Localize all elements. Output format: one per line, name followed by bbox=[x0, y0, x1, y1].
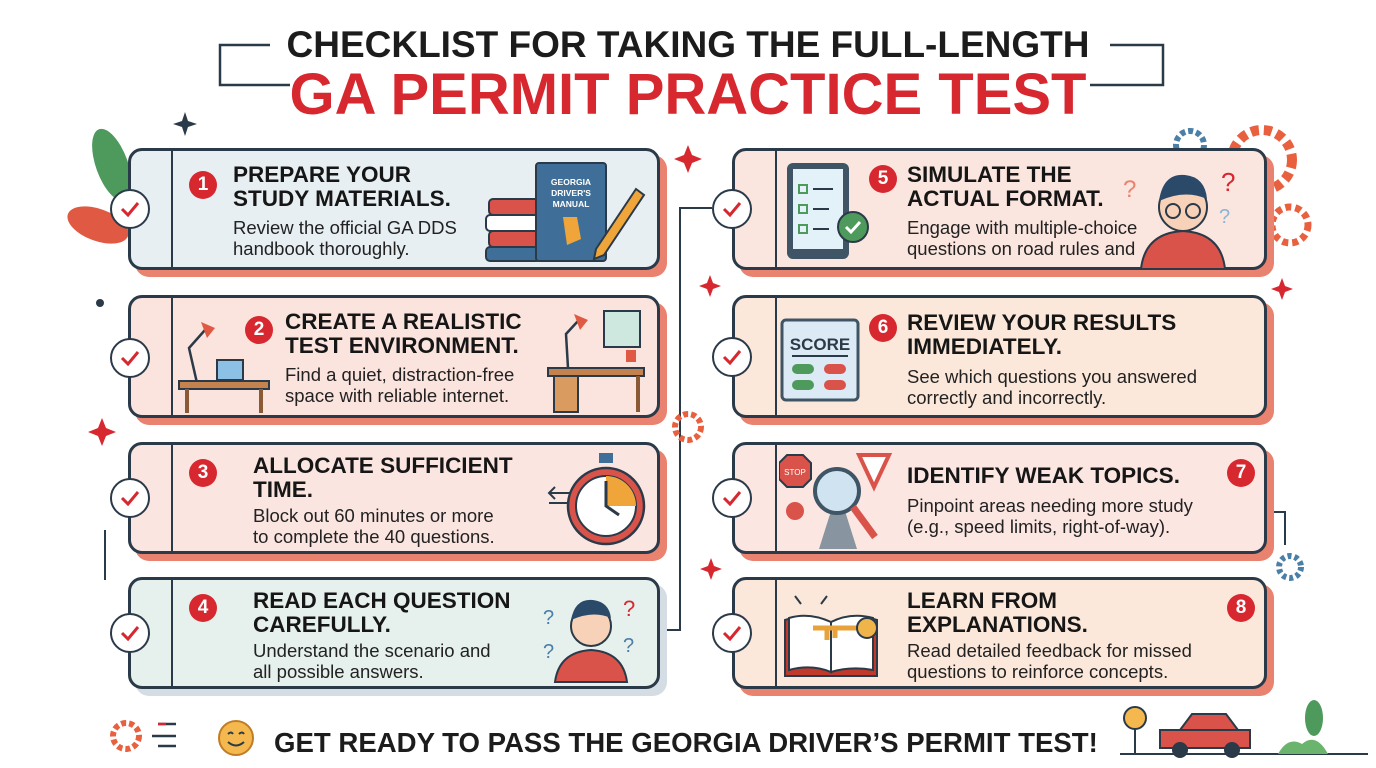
icon: thinking person: ? bbox=[1221, 167, 1235, 197]
icon: books and manual: DRIVER'S bbox=[551, 188, 591, 198]
number 2 bbox=[245, 316, 273, 344]
icon: book with key bbox=[784, 595, 878, 677]
icon: confused person: ? bbox=[623, 596, 635, 621]
number 4 bbox=[189, 594, 217, 622]
icon: score screen bbox=[780, 318, 860, 402]
body 7: Pinpoint areas needing more study bbox=[907, 495, 1193, 516]
body 4 bbox=[253, 640, 491, 682]
icon: desk with laptop bbox=[178, 322, 270, 413]
icon: thinking person: ? bbox=[1219, 206, 1230, 228]
body 1 bbox=[233, 217, 457, 259]
icon: books and manual: GEORGIA bbox=[551, 177, 591, 187]
icon: confused person: ? bbox=[543, 641, 554, 663]
icon: thinking person bbox=[1123, 167, 1235, 268]
title: CHECKLIST FOR TAKING THE FULL-LENGTH bbox=[287, 24, 1089, 65]
heading 3 bbox=[253, 453, 513, 502]
heading 8: EXPLANATIONS. bbox=[907, 612, 1088, 637]
heading 6: REVIEW YOUR RESULTS bbox=[907, 310, 1176, 335]
body 1: handbook thoroughly. bbox=[233, 238, 410, 259]
number 8 bbox=[1227, 594, 1255, 622]
card 5 bbox=[732, 148, 1267, 270]
heading 4: READ EACH QUESTION bbox=[253, 588, 511, 613]
footer icons left bbox=[110, 720, 254, 756]
heading 3: ALLOCATE SUFFICIENT bbox=[253, 453, 513, 478]
check 3 bbox=[110, 478, 150, 518]
number 8: 8 bbox=[1236, 597, 1246, 618]
icon: signs and magnifier: STOP bbox=[784, 468, 806, 477]
number 3: 3 bbox=[198, 462, 208, 483]
number 2: 2 bbox=[254, 319, 264, 340]
number 6: 6 bbox=[878, 317, 888, 338]
number 7: 7 bbox=[1236, 462, 1246, 483]
icon: car and tree bbox=[1120, 700, 1368, 758]
icon: signs and magnifier bbox=[779, 453, 892, 549]
heading 2 bbox=[285, 309, 522, 358]
body 6 bbox=[907, 366, 1197, 408]
check 6 bbox=[712, 337, 752, 377]
icon: tablet checklist bbox=[787, 163, 869, 259]
footer text: GET READY TO PASS THE GEORGIA DRIVER’S PERMIT TEST! bbox=[274, 727, 1098, 758]
card 2 bbox=[128, 295, 660, 418]
number 1: 1 bbox=[198, 174, 208, 195]
number 4: 4 bbox=[198, 597, 208, 618]
check 4 bbox=[110, 613, 150, 653]
body 6: correctly and incorrectly. bbox=[907, 387, 1106, 408]
card 3 bbox=[128, 442, 660, 554]
card 4 bbox=[128, 577, 660, 689]
card 1 bbox=[128, 148, 660, 270]
check 1 bbox=[110, 189, 150, 229]
icon: confused person: ? bbox=[543, 607, 554, 629]
icon: stopwatch bbox=[548, 453, 646, 546]
body 8 bbox=[907, 640, 1192, 682]
number 3 bbox=[189, 459, 217, 487]
heading 7: IDENTIFY WEAK TOPICS. bbox=[907, 463, 1180, 488]
icon: confused person bbox=[543, 596, 635, 683]
heading 1 bbox=[233, 162, 451, 211]
body 3: to complete the 40 questions. bbox=[253, 526, 495, 547]
check 8 bbox=[712, 613, 752, 653]
body 3 bbox=[253, 505, 495, 547]
check 2 bbox=[110, 338, 150, 378]
number 7 bbox=[1227, 459, 1255, 487]
check 7 bbox=[712, 478, 752, 518]
title bbox=[287, 24, 1089, 127]
body 2 bbox=[285, 364, 514, 406]
heading 5: SIMULATE THE bbox=[907, 162, 1072, 187]
heading 6: IMMEDIATELY. bbox=[907, 334, 1062, 359]
heading 6 bbox=[907, 310, 1176, 359]
body 2: space with reliable internet. bbox=[285, 385, 509, 406]
title frame bbox=[218, 44, 1164, 86]
check 5 bbox=[712, 189, 752, 229]
heading 8 bbox=[907, 588, 1088, 637]
heading 3: TIME. bbox=[253, 477, 313, 502]
title: GA PERMIT PRACTICE TEST bbox=[290, 62, 1086, 127]
number 6 bbox=[869, 314, 897, 342]
heading 8: LEARN FROM bbox=[907, 588, 1057, 613]
number 5 bbox=[869, 165, 897, 193]
icon: confused person: ? bbox=[623, 635, 634, 657]
icon: score screen: SCORE bbox=[790, 335, 850, 354]
heading 1: PREPARE YOUR bbox=[233, 162, 411, 187]
icon: books and manual bbox=[485, 162, 646, 262]
body 2: Find a quiet, distraction-free bbox=[285, 364, 514, 385]
body 5: Engage with multiple-choice bbox=[907, 217, 1137, 238]
body 4: all possible answers. bbox=[253, 661, 424, 682]
body 8: questions to reinforce concepts. bbox=[907, 661, 1168, 682]
heading 5 bbox=[907, 162, 1104, 211]
body 7 bbox=[907, 495, 1193, 537]
icon: books and manual: MANUAL bbox=[553, 199, 589, 209]
card 7 bbox=[732, 442, 1267, 554]
body 3: Block out 60 minutes or more bbox=[253, 505, 494, 526]
body 1: Review the official GA DDS bbox=[233, 217, 457, 238]
body 8: Read detailed feedback for missed bbox=[907, 640, 1192, 661]
number 1 bbox=[189, 171, 217, 199]
icon: desk with drawers bbox=[547, 310, 645, 413]
body 5: questions on road rules and bbox=[907, 238, 1135, 259]
heading 2: TEST ENVIRONMENT. bbox=[285, 333, 519, 358]
body 6: See which questions you answered bbox=[907, 366, 1197, 387]
heading 4 bbox=[253, 588, 511, 637]
body 7: (e.g., speed limits, right-of-way). bbox=[907, 516, 1170, 537]
heading 1: STUDY MATERIALS. bbox=[233, 186, 451, 211]
icon: thinking person: ? bbox=[1123, 176, 1136, 203]
heading 2: CREATE A REALISTIC bbox=[285, 309, 522, 334]
card 8 bbox=[732, 577, 1267, 689]
body 5 bbox=[907, 217, 1137, 259]
heading 4: CAREFULLY. bbox=[253, 612, 391, 637]
number 5: 5 bbox=[878, 168, 888, 189]
card 6 bbox=[732, 295, 1267, 418]
body 4: Understand the scenario and bbox=[253, 640, 491, 661]
heading 5: ACTUAL FORMAT. bbox=[907, 186, 1104, 211]
